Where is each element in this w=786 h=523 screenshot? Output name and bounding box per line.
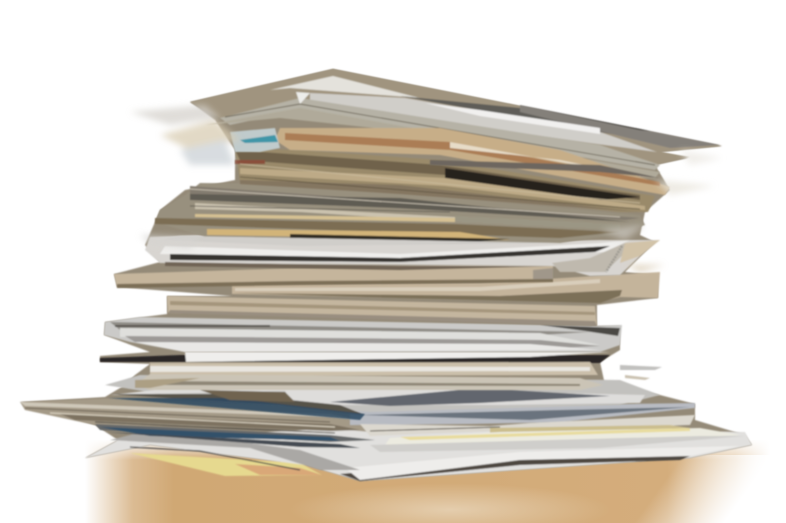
yellow sheet under stack — [130, 453, 322, 476]
base right stack — [350, 403, 695, 425]
middle tan stack — [155, 183, 645, 246]
upper dark and tan stack — [235, 148, 655, 212]
bottom stack of papers — [20, 398, 752, 481]
stack silhouette backing — [20, 69, 752, 481]
book one — [114, 264, 553, 288]
base left stack — [20, 398, 370, 432]
top stack of folders — [190, 69, 722, 195]
book two — [232, 272, 660, 303]
blurred loose paper edges — [130, 105, 722, 272]
table reflection — [290, 470, 610, 523]
middle loose stack — [100, 352, 662, 420]
bottom white sheet — [85, 425, 752, 481]
book three — [167, 296, 597, 326]
white paper block — [104, 317, 622, 352]
table surface — [85, 440, 786, 523]
curved white sheets — [145, 235, 660, 276]
